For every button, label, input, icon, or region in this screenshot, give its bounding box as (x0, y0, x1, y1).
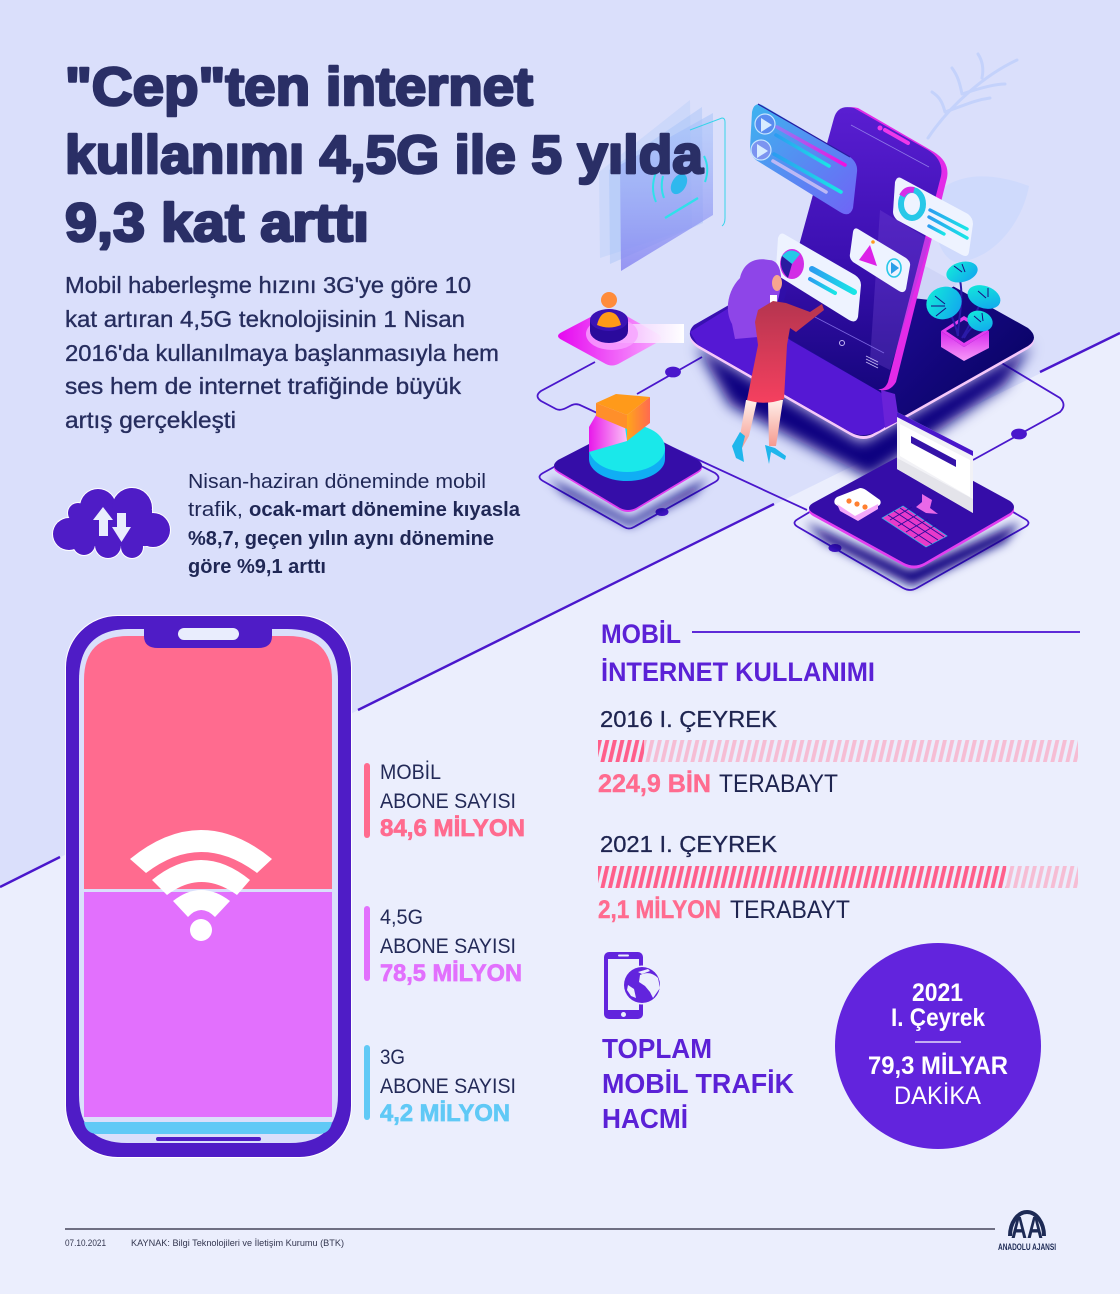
icon: cloud with arrows (52, 487, 171, 559)
traffic text: ocak-mart dönemine kıyasla (249, 499, 521, 521)
heading: mobile internet usage: İNTERNET KULLANIMI (601, 657, 875, 687)
pie chart platform (540, 394, 718, 528)
stat: 3G subscribers: ABONE SAYISI (380, 1075, 516, 1098)
stat: 3G subscribers: 4,2 MİLYON (380, 1100, 510, 1127)
chart: 2021 usage bar: TERABAYT (730, 896, 850, 924)
icon: phone and globe (604, 952, 662, 1019)
traffic text: göre %9,1 arttı (188, 556, 326, 578)
footer text: KAYNAK: Bilgi Teknolojileri ve İletişim Kurumu (BTK) (131, 1238, 344, 1248)
heading: total mobile traffic: TOPLAM (602, 1033, 712, 1064)
intro paragraph: artış gerçekleşti (65, 407, 236, 433)
donut card (893, 178, 973, 256)
traffic text: Nisan-haziran döneminde mobil (188, 471, 486, 493)
diagonal lines (0, 333, 1120, 887)
chart: 2021 usage bar: 2021 I. ÇEYREK (600, 831, 778, 857)
logo: Anadolu Ajansı: AA (1011, 1210, 1043, 1245)
logo: Anadolu Ajansı: ANADOLU AJANSI (998, 1242, 1056, 1252)
main platform (690, 232, 1034, 478)
woman figure (728, 259, 824, 464)
plant (921, 258, 1004, 361)
stat: mobile subscribers: ABONE SAYISI (380, 790, 516, 813)
chart: 2021 usage bar: 2,1 MİLYON (598, 896, 721, 924)
title (65, 57, 704, 253)
translucent hologram panels (599, 100, 725, 271)
illustration (538, 54, 1064, 590)
phone graphic: share of subscribers (66, 616, 352, 1158)
chart: 2016 usage bar: 224,9 BİN (598, 770, 711, 798)
title: kullanımı 4,5G ile 5 yılda (65, 125, 704, 185)
traffic text: %8,7, geçen yılın aynı dönemine (188, 528, 494, 550)
stat: 3G subscribers: 3G (380, 1046, 405, 1069)
speaker (178, 628, 239, 640)
magenta segment: 4.5G (84, 892, 332, 1117)
heading: total mobile traffic: MOBİL TRAFİK (602, 1068, 794, 1099)
heading: mobile internet usage: MOBİL (601, 619, 681, 649)
footer line (65, 1228, 995, 1230)
title: 9,3 kat arttı (65, 193, 369, 253)
callout: total traffic circle (835, 943, 1041, 1149)
intro paragraph: Mobil haberleşme hızını 3G'ye göre 10 (65, 272, 471, 298)
pink button platform (558, 292, 684, 366)
stat: mobile subscribers (364, 761, 525, 842)
logo: Anadolu Ajansı (998, 1210, 1056, 1252)
faint background plant (928, 54, 1029, 262)
stat: mobile subscribers: 84,6 MİLYON (380, 815, 525, 842)
big phone (778, 107, 947, 390)
home bar (156, 1137, 261, 1141)
intro paragraph (65, 272, 499, 433)
stat: 3G subscribers (364, 1045, 516, 1127)
footer text: 07.10.2021 (65, 1238, 106, 1248)
pink segment: mobile subscribers (84, 636, 332, 889)
traffic text (188, 471, 521, 578)
callout: total traffic circle: DAKİKA (894, 1081, 981, 1110)
blue play card (750, 104, 857, 214)
intro paragraph: ses hem de internet trafiğinde büyük (65, 373, 462, 399)
title: "Cep"ten internet (65, 57, 533, 117)
chart: 2016 usage bar: TERABAYT (719, 770, 838, 798)
heading: total mobile traffic: HACMİ (602, 1103, 688, 1134)
intro paragraph: 2016'da kullanılmaya başlanmasıyla hem (65, 340, 499, 366)
stat: mobile subscribers: MOBİL (380, 761, 441, 784)
notch (144, 628, 272, 648)
icon: wifi (130, 830, 272, 941)
callout: total traffic circle: 79,3 MİLYAR (868, 1052, 1008, 1080)
chart: 2016 usage bar (598, 706, 1078, 798)
chart: 2021 usage bar (598, 831, 1078, 924)
image card (850, 228, 910, 292)
heading: total mobile traffic (602, 1033, 794, 1134)
callout: total traffic circle: I. Çeyrek (891, 1004, 985, 1032)
stat: 4.5G subscribers: 78,5 MİLYON (380, 960, 522, 987)
circuit lines (538, 357, 1064, 510)
callout: total traffic circle: 2021 (912, 979, 963, 1007)
stat: 4.5G subscribers: ABONE SAYISI (380, 935, 516, 958)
chart: 2016 usage bar: 2016 I. ÇEYREK (600, 706, 778, 732)
heading: mobile internet usage (601, 619, 1080, 687)
traffic text: trafik, (188, 499, 243, 521)
stat: 4.5G subscribers: 4,5G (380, 906, 423, 929)
computer platform (794, 412, 1028, 590)
cyan segment: 3G (84, 1122, 332, 1134)
stat: 4.5G subscribers (364, 906, 522, 987)
chart card (776, 234, 861, 321)
intro paragraph: kat artıran 4,5G teknolojisinin 1 Nisan (65, 306, 465, 332)
